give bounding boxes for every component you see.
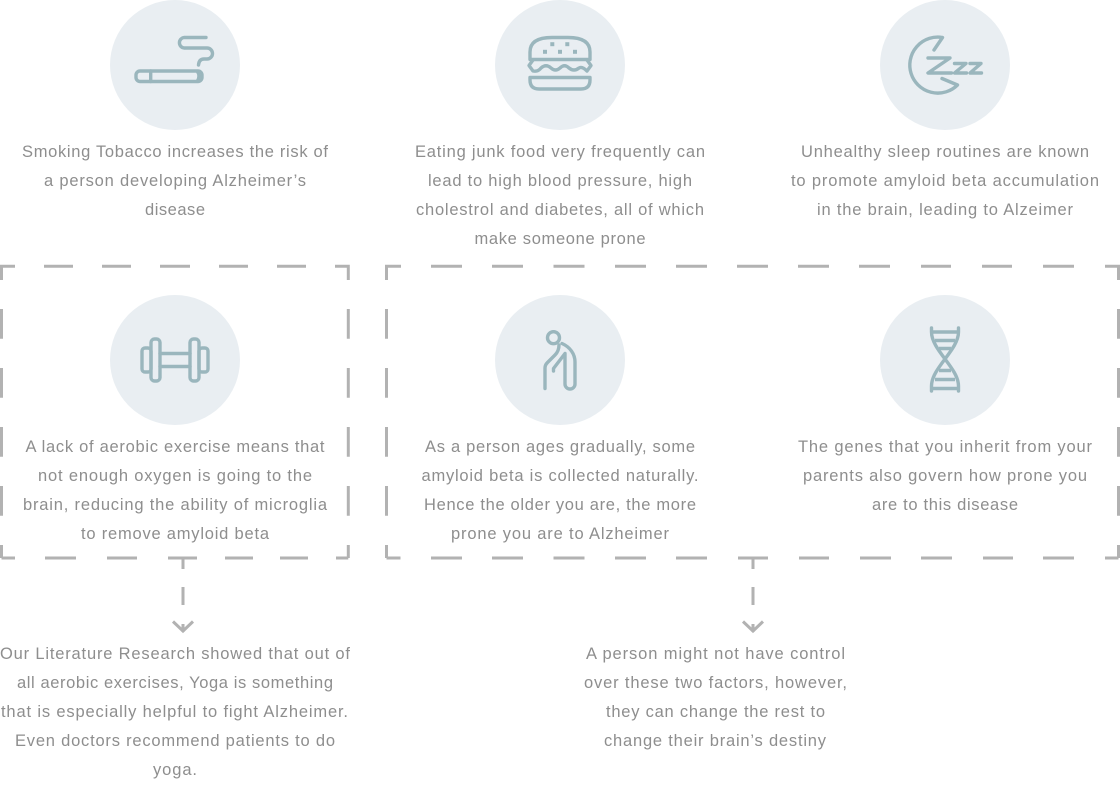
text: genes: parents also govern how prone you bbox=[803, 467, 1087, 485]
panel: ageing bbox=[422, 295, 698, 543]
text: ageing: As a person ages gradually, some bbox=[425, 438, 695, 456]
text: ageing: Hence the older you are, the more bbox=[424, 496, 696, 514]
text: exercise: brain, reducing the ability of microglia bbox=[23, 496, 328, 514]
icon: DNA helix bbox=[880, 295, 1010, 425]
icon: moon and zzz bbox=[880, 0, 1010, 130]
text: smoking bbox=[22, 143, 328, 219]
text: yoga research note: Our Literature Research showed that out of bbox=[0, 645, 350, 663]
icon: dumbbell bbox=[110, 295, 240, 425]
text: junk food: Eating junk food very frequently can bbox=[415, 143, 705, 161]
icon: elderly person with cane bbox=[495, 295, 625, 425]
text: ageing: amyloid beta is collected naturally. bbox=[422, 467, 698, 485]
text: genes: The genes that you inherit from your bbox=[798, 438, 1092, 456]
text: yoga research note: Even doctors recommend patients to do bbox=[15, 732, 335, 750]
panel: genes bbox=[798, 295, 1092, 514]
text: junk food bbox=[415, 143, 705, 248]
dashed box: age and genes bbox=[386, 266, 1118, 558]
text: sleep: Unhealthy sleep routines are known bbox=[801, 143, 1089, 161]
arrow: age and genes to note bbox=[743, 558, 763, 632]
panel: junk food bbox=[415, 0, 705, 248]
text: junk food: make someone prone bbox=[474, 230, 646, 248]
text: smoking: disease bbox=[145, 201, 205, 219]
text: ageing bbox=[422, 438, 698, 543]
panel: smoking bbox=[22, 0, 328, 219]
icon: burger bbox=[495, 0, 625, 130]
text: ageing: prone you are to Alzheimer bbox=[451, 525, 670, 543]
icon: cigarette bbox=[110, 0, 240, 130]
panel: exercise bbox=[23, 295, 328, 543]
text: exercise bbox=[23, 438, 328, 543]
text: junk food: cholestrol and diabetes, all of which bbox=[416, 201, 704, 219]
text: sleep: to promote amyloid beta accumulation bbox=[791, 172, 1099, 190]
text: sleep bbox=[791, 143, 1099, 219]
text: yoga research note: that is especially helpful to fight Alzheimer. bbox=[1, 703, 348, 721]
text: exercise: to remove amyloid beta bbox=[81, 525, 270, 543]
panel: sleep bbox=[791, 0, 1099, 219]
text: exercise: A lack of aerobic exercise means that bbox=[26, 438, 325, 456]
text: genes: are to this disease bbox=[872, 496, 1018, 514]
text: control note: change their brain’s destiny bbox=[604, 732, 827, 750]
text: genes bbox=[798, 438, 1092, 514]
text: yoga research note bbox=[0, 645, 350, 779]
text: control note: over these two factors, however, bbox=[584, 674, 847, 692]
text: control note: A person might not have control bbox=[586, 645, 845, 663]
text: sleep: in the brain, leading to Alzeimer bbox=[817, 201, 1074, 219]
text: junk food: lead to high blood pressure, high bbox=[428, 172, 692, 190]
text: exercise: not enough oxygen is going to the bbox=[38, 467, 312, 485]
arrow: exercise to yoga note bbox=[173, 558, 193, 632]
text: smoking: a person developing Alzheimer’s bbox=[44, 172, 306, 190]
text: control note bbox=[584, 645, 847, 750]
text: yoga research note: all aerobic exercises, Yoga is something bbox=[17, 674, 333, 692]
dashed box: modifiable exercise factor bbox=[2, 266, 348, 558]
text: yoga research note: yoga. bbox=[153, 761, 197, 779]
text: control note: they can change the rest to bbox=[606, 703, 825, 721]
text: smoking: Smoking Tobacco increases the risk of bbox=[22, 143, 328, 161]
